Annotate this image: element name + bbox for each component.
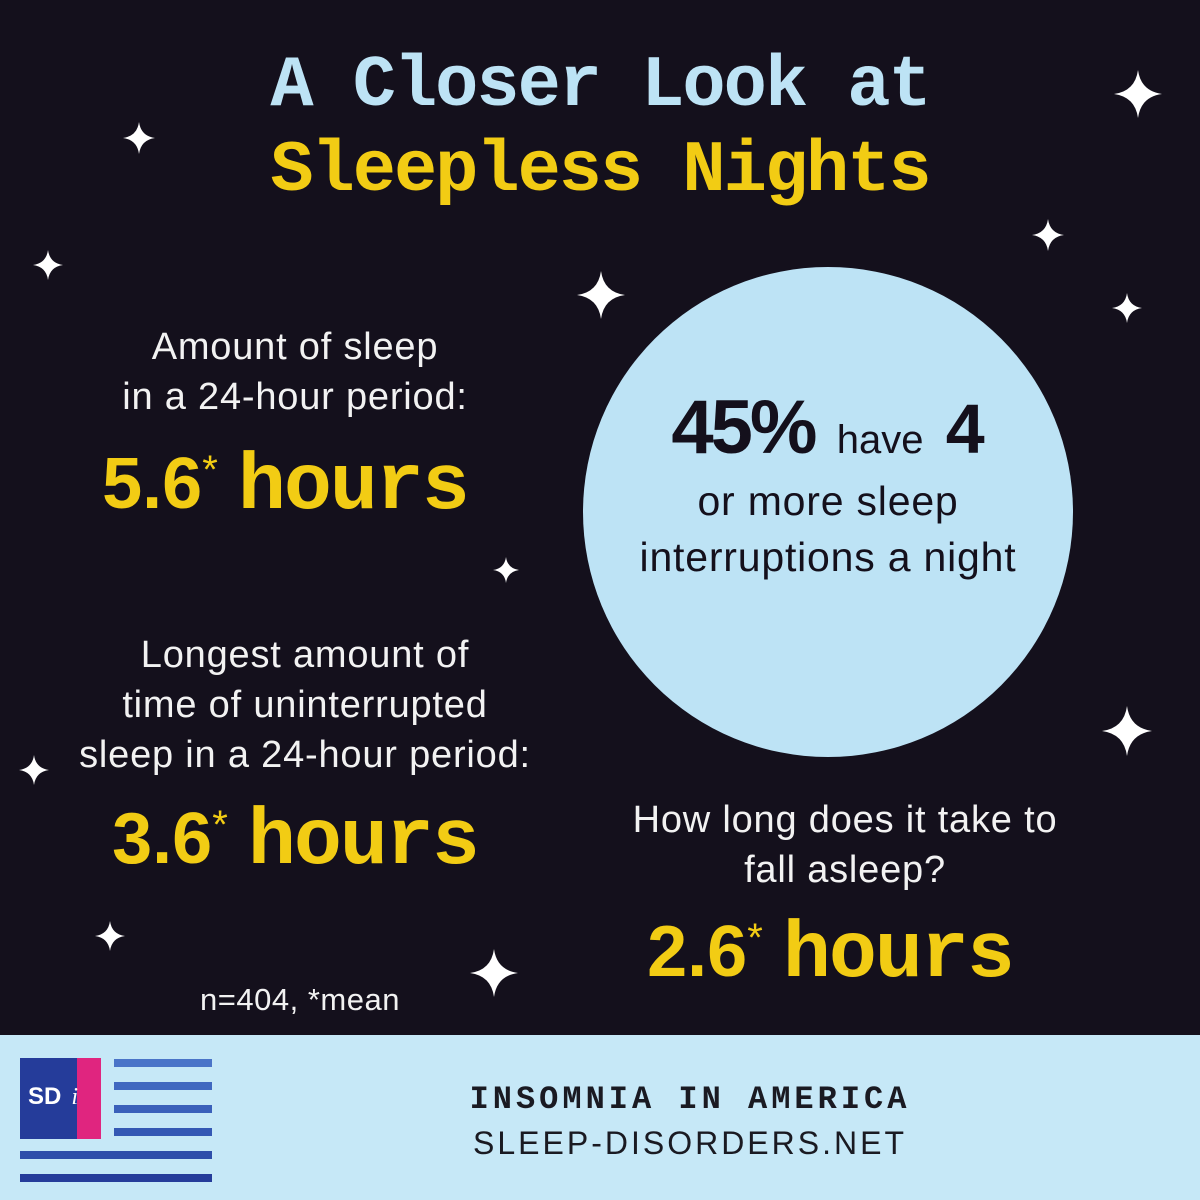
stat: fall asleep: fall asleep?	[744, 849, 946, 891]
stat: amount of sleep: Amount of sleep	[152, 326, 438, 368]
stat: fall asleep: 2.6* hours	[647, 910, 1013, 1001]
stat: amount of sleep: in a 24-hour period:	[122, 376, 468, 418]
stat: amount of sleep: 5.6* hours	[102, 442, 468, 533]
moon stat	[640, 385, 1016, 580]
moon	[583, 267, 1073, 757]
stat: uninterrupted: Longest amount of	[141, 634, 469, 676]
title	[270, 45, 930, 212]
stat: fall asleep	[633, 799, 1057, 1001]
footnote: n=404, *mean	[200, 982, 400, 1017]
moon stat: interruptions a night	[640, 534, 1016, 580]
stat: uninterrupted: sleep in a 24-hour period:	[79, 734, 531, 776]
logo	[20, 1058, 212, 1182]
moon stat: 45% have 4	[671, 385, 985, 470]
stat: fall asleep: How long does it take to	[633, 799, 1057, 841]
logo: SD i	[28, 1083, 78, 1110]
stat: uninterrupted: time of uninterrupted	[122, 684, 488, 726]
footer text: INSOMNIA IN AMERICA	[470, 1081, 910, 1118]
stat: uninterrupted: 3.6* hours	[112, 797, 478, 888]
title: A Closer Look at	[270, 45, 930, 127]
footer	[0, 1035, 1200, 1200]
title: Sleepless Nights	[270, 130, 930, 212]
stat: amount of sleep	[102, 326, 468, 533]
moon stat: or more sleep	[697, 478, 959, 524]
stat: uninterrupted	[79, 634, 531, 888]
footer text	[470, 1081, 910, 1161]
footer text: SLEEP-DISORDERS.NET	[473, 1125, 907, 1161]
